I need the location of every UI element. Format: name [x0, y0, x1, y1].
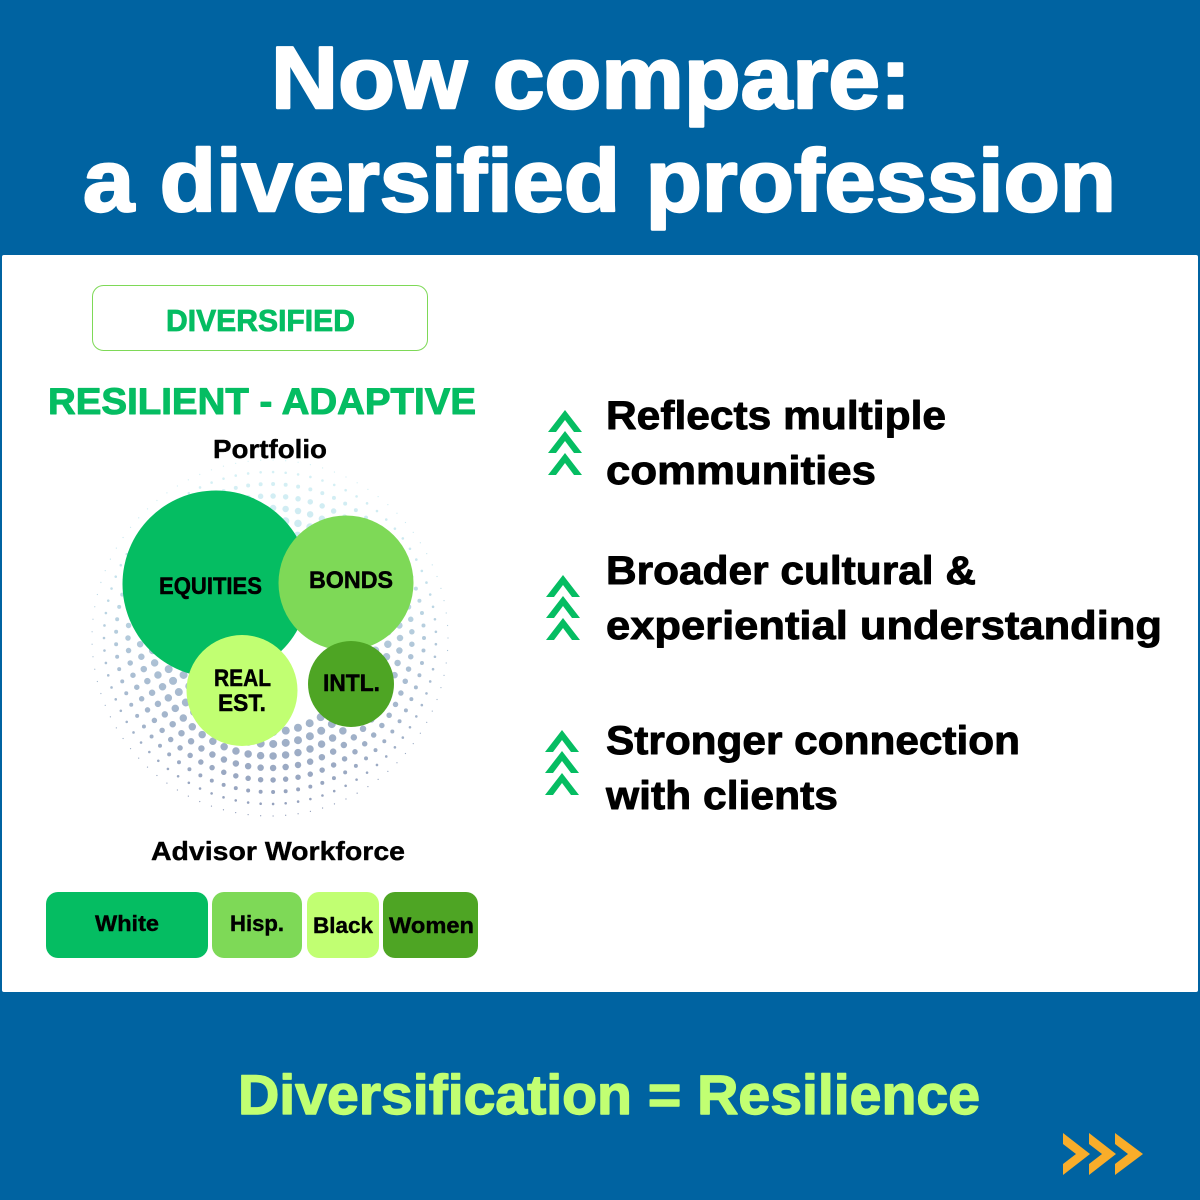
panel: white content card — [2, 255, 1198, 992]
chart: portfolio circles — [122, 490, 414, 746]
halftone dot pattern — [92, 460, 448, 816]
circle: real estate: EST. — [218, 690, 266, 717]
segment: black: Black — [313, 913, 374, 938]
circle: bonds: BONDS — [309, 567, 393, 594]
text: benefit 2: Broader cultural & — [606, 549, 976, 593]
circle: international — [308, 641, 394, 727]
badge: diversified: DIVERSIFIED — [166, 303, 355, 338]
title: a diversified profession — [83, 131, 1116, 230]
icon: triple up chevrons 3 — [545, 730, 579, 795]
title: Now compare: — [271, 28, 911, 127]
bar: advisor workforce segments — [46, 892, 478, 958]
icon: triple up chevrons 2 — [546, 575, 580, 640]
segment: hispanic — [212, 892, 302, 958]
circle: equities — [122, 490, 310, 678]
text: benefit 3 — [605, 719, 1020, 818]
text: benefit 1: communities — [606, 449, 876, 493]
circle: equities: EQUITIES — [159, 573, 262, 600]
segment: white — [46, 892, 208, 958]
circle: bonds — [278, 516, 414, 650]
text: benefit 3: Stronger connection — [606, 719, 1020, 763]
icon: triple up chevrons 1 — [548, 410, 582, 475]
text: benefit 2: experiential understanding — [606, 604, 1162, 648]
circle: international: INTL. — [323, 670, 380, 697]
heading: portfolio: Portfolio — [213, 434, 327, 464]
segment: white: White — [95, 911, 159, 936]
title — [83, 28, 1116, 230]
icon: orange next arrows — [1063, 1133, 1143, 1175]
badge: diversified — [92, 286, 428, 350]
circle: real estate — [186, 635, 298, 746]
segment: women — [383, 892, 478, 958]
segment: women: Women — [389, 913, 474, 938]
text: benefit 1: Reflects multiple — [606, 394, 946, 438]
text: benefit 2 — [606, 549, 1162, 648]
text: benefit 3: with clients — [605, 774, 838, 818]
text: benefit 1 — [606, 394, 946, 493]
heading: resilient adaptive: RESILIENT - ADAPTIVE — [48, 381, 476, 422]
takeaway text: Diversification = Resilience — [238, 1063, 980, 1126]
circle: real estate: REAL — [214, 665, 271, 692]
heading: advisor workforce: Advisor Workforce — [151, 836, 405, 866]
segment: black — [307, 892, 379, 958]
segment: hispanic: Hisp. — [230, 911, 284, 936]
